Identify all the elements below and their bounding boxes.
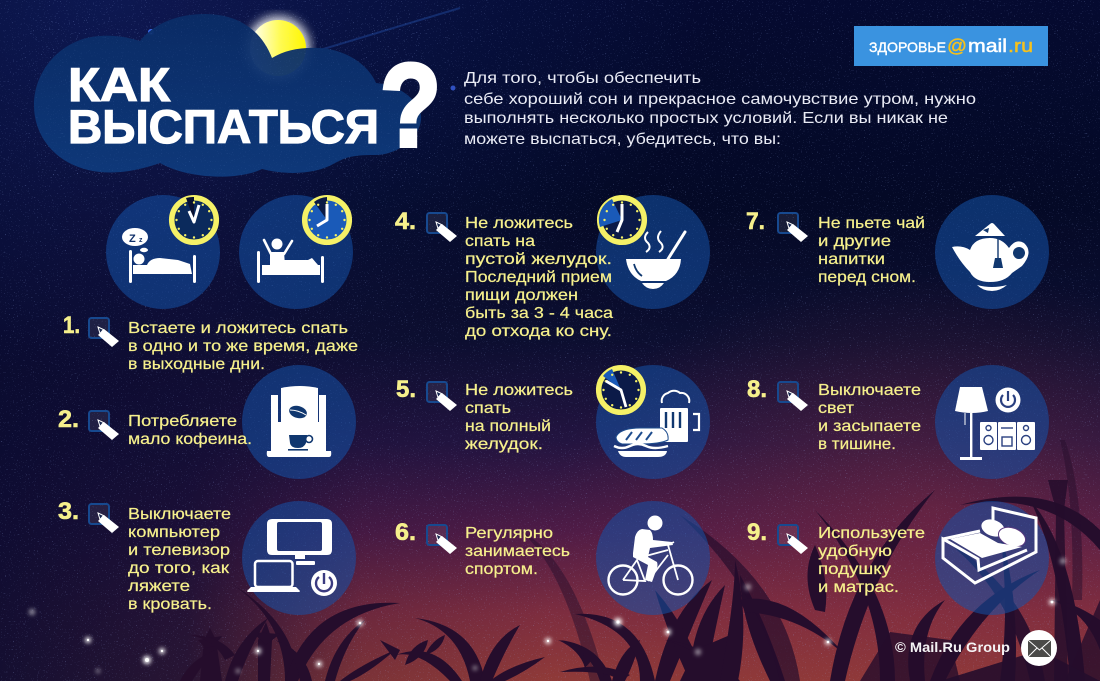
title — [68, 40, 441, 172]
title: КАК — [68, 58, 170, 111]
icon: bed with pillows — [943, 508, 1036, 583]
item 4: до отхода ко сну. — [465, 323, 612, 340]
item 4: спать на — [465, 233, 535, 250]
cloud — [34, 14, 421, 177]
item 5: спать — [465, 400, 511, 417]
moon — [246, 16, 310, 80]
clock: late dinner — [599, 368, 643, 412]
intro text: выполнять несколько простых условий. Если вы никак не — [464, 110, 948, 127]
item 9: Используете — [818, 525, 925, 542]
icon: sleeping in bed — [122, 228, 196, 283]
item 7: и другие — [818, 233, 891, 250]
logo: Здоровье@mail.ru: @ — [947, 36, 967, 56]
icon: waking up — [257, 238, 324, 283]
cloud stars — [34, 14, 421, 177]
item 2: 2. — [58, 406, 79, 433]
item 9: 9. — [747, 519, 767, 546]
item 1 — [63, 312, 358, 373]
item 5: желудок. — [465, 436, 543, 453]
item 6: занимаетесь — [465, 543, 570, 560]
item 8: Выключаете — [818, 382, 921, 399]
item 2 — [58, 406, 252, 448]
item 6: 6. — [395, 519, 416, 546]
item 7: 7. — [746, 208, 765, 235]
item 3: ляжете — [128, 578, 190, 595]
item 2: Потребляете — [128, 413, 237, 430]
plants silhouette — [180, 440, 1100, 681]
item 5: на полный — [465, 418, 551, 435]
item 1: в выходные дни. — [128, 356, 265, 373]
item 3: 3. — [58, 498, 79, 525]
icon: sleeping in bed: Z — [129, 233, 136, 245]
title: ВЫСПАТЬСЯ — [68, 100, 379, 153]
item 1: в одно и то же время, даже — [128, 338, 358, 355]
item 2: мало кофеина. — [128, 431, 252, 448]
icon: sleeping in bed: z — [139, 237, 143, 244]
item 7: Не пьете чай — [818, 215, 925, 232]
item 7: напитки — [818, 251, 885, 268]
item 1: Встаете и ложитесь спать — [128, 320, 348, 337]
item 9: и матрас. — [818, 579, 899, 596]
item 3: компьютер — [128, 524, 220, 541]
item 8: в тишине. — [818, 436, 896, 453]
item 6: Регулярно — [465, 525, 553, 542]
title: ? — [380, 40, 441, 172]
icon: soup bowl — [626, 231, 685, 289]
item 8: 8. — [747, 376, 767, 403]
item 4 — [395, 208, 613, 340]
fireflies — [29, 558, 1066, 673]
icon: coffee machine — [267, 386, 331, 457]
item 4: Не ложитесь — [465, 215, 573, 232]
icon: lamp, power and stereo — [955, 387, 1035, 460]
icon circles — [106, 195, 1049, 615]
icon: cyclist — [608, 516, 692, 594]
item 9: удобную — [818, 543, 892, 560]
clock: dinner — [599, 198, 644, 242]
icon: envelope — [1021, 630, 1057, 666]
logo: Здоровье@mail.ru: ЗДОРОВЬЕ — [869, 39, 946, 55]
logo: Здоровье@mail.ru: mail — [968, 36, 1007, 56]
item 4: 4. — [395, 208, 416, 235]
item 6: спортом. — [465, 561, 538, 578]
intro text: можете выспаться, убедитесь, что вы: — [464, 131, 781, 148]
item 3: и телевизор — [128, 542, 230, 559]
item 3 — [58, 498, 231, 613]
item 8: свет — [818, 400, 855, 417]
item 8: и засыпаете — [818, 418, 921, 435]
item 4: быть за 3 - 4 часа — [465, 305, 613, 322]
item 7 — [746, 208, 925, 286]
item 5 — [396, 376, 573, 453]
item 5: 5. — [396, 376, 416, 403]
clock: wake up — [305, 197, 349, 242]
clock: bedtime — [172, 197, 216, 242]
item 5: Не ложитесь — [465, 382, 573, 399]
item 1: 1. — [63, 312, 80, 339]
copyright: © Mail.Ru Group — [895, 639, 1010, 655]
icon: sandwich and beer — [614, 391, 699, 457]
logo: Здоровье@mail.ru: .ru — [1008, 36, 1033, 56]
item 3: Выключаете — [128, 506, 231, 523]
logo: Здоровье@mail.ru — [854, 26, 1048, 66]
item 7: перед сном. — [818, 269, 916, 286]
item 9 — [747, 519, 925, 596]
item 4: Последний прием — [465, 269, 612, 286]
item 4: пустой желудок. — [465, 251, 612, 268]
icon: computer, laptop, power — [247, 519, 337, 596]
item 3: в кровать. — [128, 596, 212, 613]
intro text — [464, 70, 976, 148]
item 8 — [747, 376, 921, 453]
item 3: до того, как — [128, 560, 230, 577]
item 9: подушку — [818, 561, 891, 578]
intro text: Для того, чтобы обеспечить — [464, 70, 701, 87]
icon: teapot — [952, 223, 1029, 291]
item 6 — [395, 519, 570, 578]
intro text: себе хороший сон и прекрасное самочувствие утром, нужно — [464, 91, 976, 108]
item 4: пищи должен — [465, 287, 578, 304]
